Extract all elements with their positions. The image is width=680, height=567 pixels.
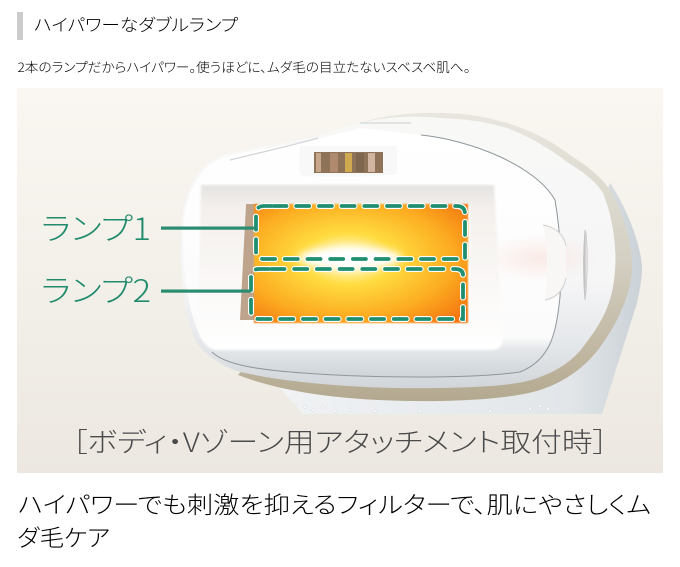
lamp recess [198, 185, 503, 350]
bottom tagline: ダ毛ケア [17, 519, 110, 553]
label: lamp 2: ランプ2 [41, 266, 151, 311]
lamp 1 dashed outline [256, 206, 465, 259]
bottom tagline [17, 486, 651, 553]
cover body [187, 288, 560, 346]
lamp side shadow [240, 204, 258, 320]
recess inner [468, 206, 470, 265]
intro text: 2本のランプだからハイパワー。使うほどに、ムダ毛の目立たないスベスベ肌へ。 [18, 57, 470, 76]
connector housing [299, 146, 397, 177]
bottom tagline: ハイパワーでも刺激を抑えるフィルターで、肌にやさしくム [18, 486, 651, 520]
label: lamp 1: ランプ1 [41, 204, 151, 249]
lamp glow [254, 204, 468, 323]
side tab edge [543, 225, 566, 300]
vent dots [295, 403, 549, 412]
beige band [238, 113, 632, 401]
lamp 2 dashed outline [251, 269, 463, 319]
side slot [584, 230, 587, 300]
heading accent bar [17, 12, 23, 40]
panel: product photo [17, 88, 663, 473]
cover top highlight [230, 123, 411, 160]
side tab [546, 232, 566, 291]
metal contacts [314, 152, 383, 173]
heading: ハイパワーなダブルランプ [34, 11, 238, 36]
device illustration [181, 113, 642, 414]
central flare [298, 247, 402, 269]
white shell [181, 117, 615, 388]
cover seam [212, 135, 561, 377]
pink light reflection [502, 243, 574, 273]
caption: ［ボディ・Vゾーン用アタッチメント取付時］ [72, 421, 608, 460]
device lower body [277, 183, 642, 414]
lamp 1 leader line [161, 226, 256, 230]
lamp 2 leader line [161, 290, 251, 293]
